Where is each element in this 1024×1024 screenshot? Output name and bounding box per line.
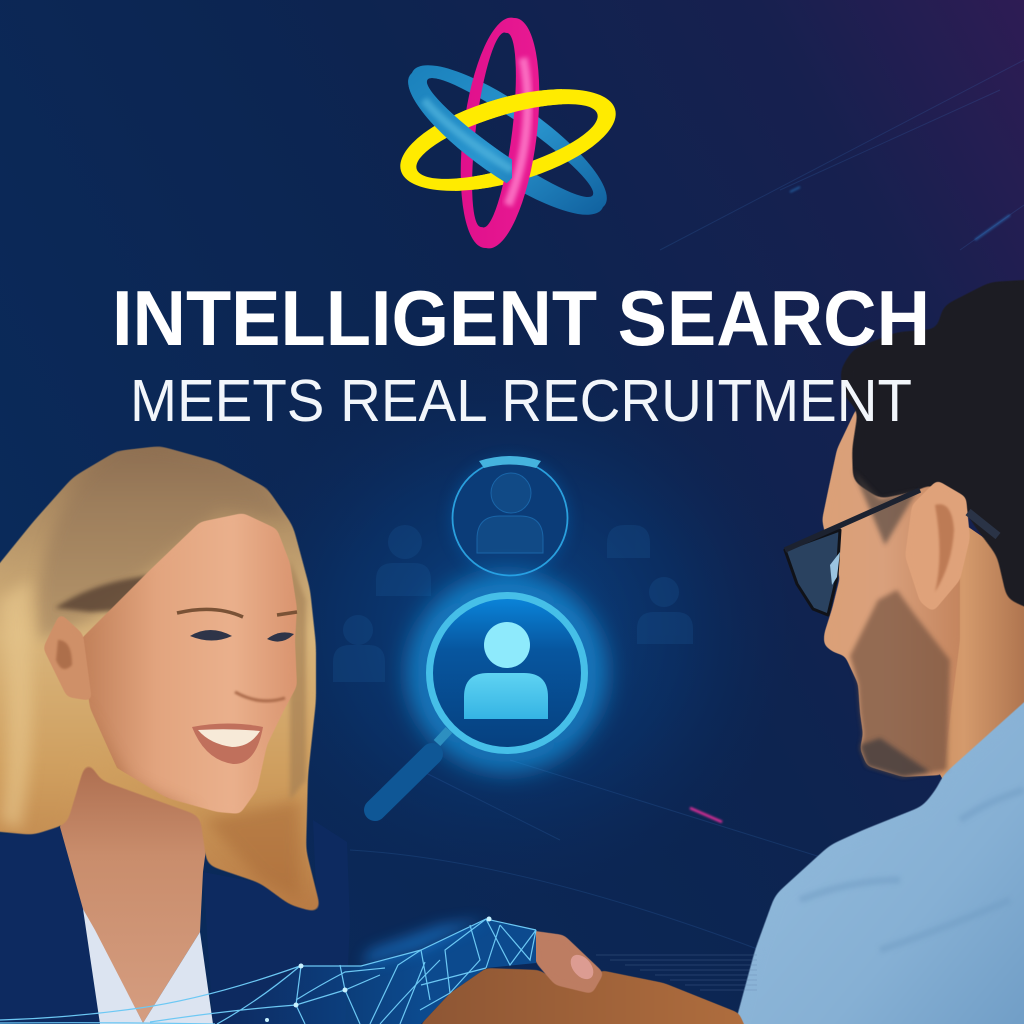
thumb nail [566,950,598,984]
woman ear [43,613,92,701]
network wires [0,919,536,1024]
search magnifier with candidate [375,589,591,810]
faint background candidates [333,525,693,682]
magnifier lens [430,596,584,750]
digital hand fill [220,919,536,1024]
thumb [528,930,604,994]
woman right eye [267,632,294,642]
man sideburn [853,470,917,545]
glasses tip behind ear [968,512,998,536]
woman face shading [102,734,188,804]
candidate body [464,673,548,719]
woman: left figure [0,440,350,1024]
magnifier glow [423,589,591,757]
icon: yellow ring [400,89,616,191]
table stripes [596,955,757,990]
man neck [900,480,1024,780]
candidate icon: upper faint circle [450,456,570,578]
woman hair shading [0,440,306,900]
man shirt [735,670,1024,1024]
candidate head [484,622,530,668]
man chin shadow [860,738,930,777]
woman lips [192,724,263,764]
logo: three interlocking rings [400,18,616,248]
man glasses [785,490,998,615]
man face [822,405,960,777]
woman face [80,513,297,814]
woman right eyebrow [277,612,297,615]
network nodes [265,916,492,1022]
man ear [905,480,970,612]
woman left eyebrow [177,609,243,617]
man inner ear [935,504,954,592]
woman nose shadow [235,692,285,701]
man hair [840,278,1024,622]
subtitle: MEETS REAL RECRUITMENT [130,368,912,434]
icon: blue ring [408,65,607,215]
upper candidate body [477,516,543,553]
man: right figure [735,278,1024,1024]
woman blouse [83,909,213,1024]
title: INTELLIGENT SEARCH [112,274,930,362]
woman jacket [0,820,350,1024]
digital handshake [0,916,760,1024]
upper arc cap [479,456,541,468]
upper circle ring [452,460,568,576]
man beard [850,590,950,777]
magnifier handle [375,754,432,810]
upper circle glow [450,458,570,578]
digital hand glow [361,919,486,966]
man shirt folds [800,790,1024,950]
woman hair [0,446,322,914]
magnifier neck [437,730,449,743]
icon: yellow ring overlaps [455,89,562,191]
woman teeth [198,729,260,747]
upper candidate head [491,473,531,513]
woman inner ear [56,640,72,669]
man's arm [421,968,760,1024]
glasses temple [785,490,920,550]
icon: pink ring [461,18,539,248]
icon: pink ring highlight [508,58,528,205]
icon: blue ring front bar [408,67,512,184]
glasses eye [830,552,840,585]
glasses lens [785,530,840,615]
woman neck [60,745,215,1023]
woman left eye [190,630,232,640]
